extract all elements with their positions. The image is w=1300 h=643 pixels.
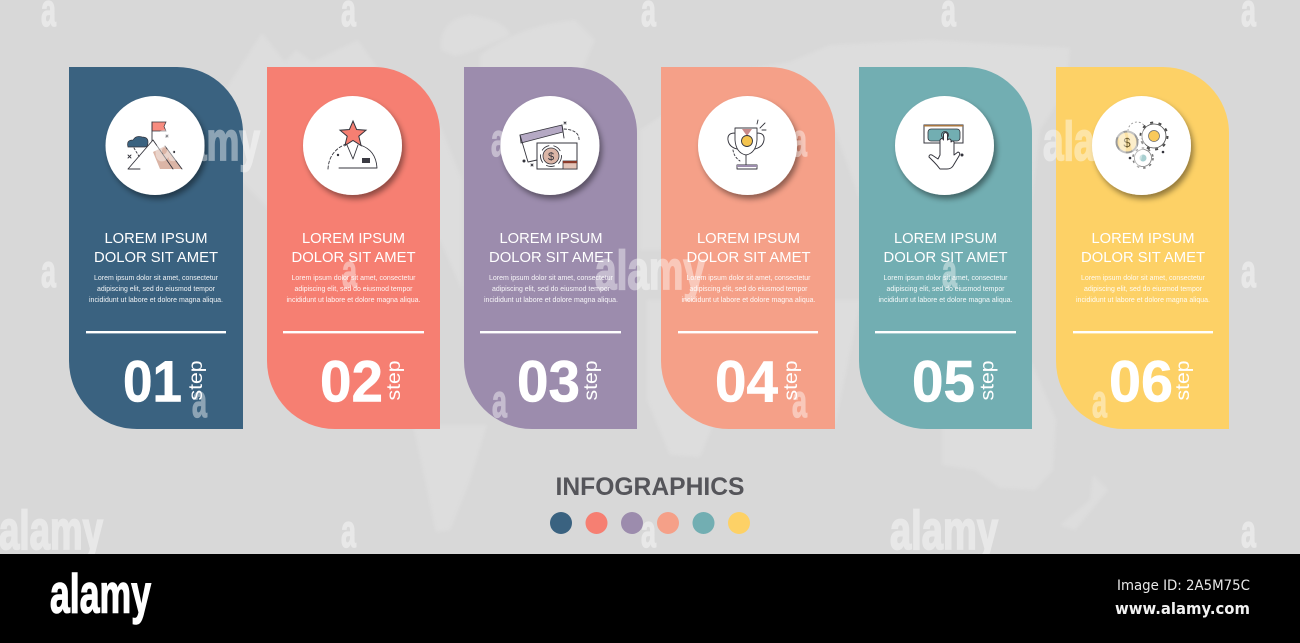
card shape [1056, 67, 1229, 429]
body text: adipiscing elit, sed do eiusmod tempor [690, 286, 808, 293]
watermark: a [491, 114, 506, 166]
icon badge [1092, 96, 1191, 195]
divider [678, 331, 818, 333]
card shape [69, 67, 243, 429]
watermark: a [342, 245, 357, 297]
title: LOREM IPSUM [697, 230, 800, 247]
divider [283, 331, 424, 333]
body text: incididunt ut labore et dolore magna aliqua. [286, 297, 421, 304]
step card 6 [1056, 67, 1229, 429]
icon badge [106, 96, 204, 195]
icon badge [500, 96, 600, 195]
footer logo: alamy [50, 562, 151, 624]
body text [286, 275, 421, 304]
icon: star above person [328, 121, 377, 169]
icon: hand pressing banknote [924, 125, 964, 169]
step number: 02 [320, 350, 383, 414]
image id: Image ID: 2A5M75C [1117, 578, 1250, 594]
step card 1 [69, 67, 243, 429]
body text: incididunt ut labore et dolore magna aliqua. [878, 297, 1013, 304]
icon: mountain with flag [128, 122, 182, 169]
body text: adipiscing elit, sed do eiusmod tempor [97, 286, 216, 293]
website: www.alamy.com [1115, 599, 1250, 618]
body text: adipiscing elit, sed do eiusmod tempor [492, 286, 611, 293]
body text: Lorem ipsum dolor sit amet, consectetur [94, 275, 219, 282]
step number: 04 [715, 350, 778, 414]
subtitle: DOLOR SIT AMET [1081, 249, 1205, 266]
body text: incididunt ut labore et dolore magna aliqua. [1076, 297, 1210, 304]
watermark: alamy [595, 239, 705, 301]
body text [878, 275, 1013, 304]
watermark: a [792, 375, 807, 427]
icon badge [303, 96, 402, 195]
step label: step [1173, 360, 1194, 400]
step number: 03 [517, 350, 580, 414]
body text [89, 275, 223, 304]
body text [682, 275, 816, 304]
body text: Lorem ipsum dolor sit amet, consectetur [292, 275, 416, 282]
step label: step [581, 360, 602, 400]
watermark: a [1092, 375, 1107, 427]
body text [1076, 275, 1210, 304]
watermark: a [1241, 245, 1256, 297]
watermark: a [492, 375, 507, 427]
body text: Lorem ipsum dolor sit amet, consectetur [884, 275, 1008, 282]
card shape [464, 67, 637, 429]
body text: adipiscing elit, sed do eiusmod tempor [294, 286, 413, 293]
subtitle: DOLOR SIT AMET [489, 249, 613, 266]
step label: step [978, 360, 998, 400]
divider [1073, 331, 1213, 333]
step number: 05 [912, 350, 975, 414]
icon: cards and money [520, 122, 579, 169]
step number: 06 [1109, 350, 1173, 414]
step label: step [186, 360, 207, 400]
world map silhouette [222, 15, 1108, 532]
subtitle: DOLOR SIT AMET [884, 249, 1008, 266]
body text: Lorem ipsum dolor sit amet, consectetur [489, 275, 614, 282]
watermark: alamy [155, 110, 260, 172]
title: LOREM IPSUM [894, 230, 997, 247]
step card 5 [859, 67, 1032, 429]
title: LOREM IPSUM [104, 230, 208, 247]
icon: gears and coin [1116, 122, 1168, 168]
body text: Lorem ipsum dolor sit amet, consectetur [686, 275, 811, 282]
body text [484, 275, 618, 304]
body text: adipiscing elit, sed do eiusmod tempor [886, 286, 1005, 293]
icon: gears and coin: $ [1123, 135, 1131, 150]
footer bar [0, 554, 1300, 643]
step card 3 [464, 67, 637, 429]
step card 2 [267, 67, 440, 429]
icon badge [698, 96, 797, 195]
watermark: a [192, 375, 207, 427]
divider [875, 331, 1016, 333]
watermark: a [942, 245, 957, 297]
watermark: alamy [890, 499, 998, 561]
watermark: a [641, 505, 656, 557]
card shape [859, 67, 1032, 429]
body text: incididunt ut labore et dolore magna aliqua. [484, 297, 618, 304]
title: LOREM IPSUM [302, 230, 405, 247]
watermark: alamy [0, 499, 103, 561]
heading: INFOGRAPHICS [556, 473, 744, 501]
card shape [661, 67, 835, 429]
watermark: a [1241, 505, 1256, 557]
step number: 01 [123, 350, 182, 414]
step card 4 [661, 67, 835, 429]
legend dots [550, 512, 750, 534]
title: LOREM IPSUM [1092, 230, 1194, 247]
step label: step [781, 360, 802, 400]
watermark: a [792, 114, 807, 166]
subtitle: DOLOR SIT AMET [292, 249, 416, 266]
watermark: a [41, 245, 56, 297]
icon: trophy with medal [728, 120, 766, 169]
body text: adipiscing elit, sed do eiusmod tempor [1084, 286, 1203, 293]
step label: step [384, 360, 405, 400]
subtitle: DOLOR SIT AMET [94, 249, 218, 266]
icon badge [895, 96, 994, 195]
body text: Lorem ipsum dolor sit amet, consectetur [1081, 275, 1206, 282]
subtitle: DOLOR SIT AMET [686, 249, 810, 266]
body text: incididunt ut labore et dolore magna aliqua. [682, 297, 816, 304]
watermark: alamy [1043, 110, 1148, 172]
card shape [267, 67, 440, 429]
body text: incididunt ut labore et dolore magna aliqua. [89, 297, 223, 304]
icon: cards and money: $ [548, 151, 554, 163]
watermark: a [341, 505, 356, 557]
divider [480, 331, 621, 333]
title: LOREM IPSUM [500, 230, 602, 247]
divider [86, 331, 226, 333]
